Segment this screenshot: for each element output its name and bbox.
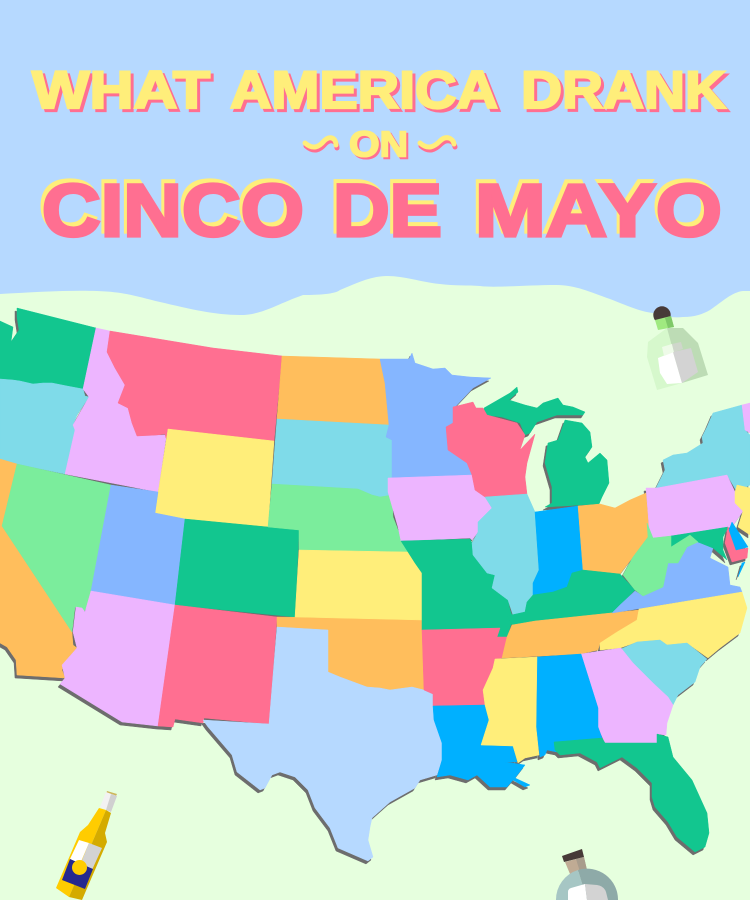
- icon: tequila bottle bottom: [556, 849, 618, 900]
- state: pennsylvania: [646, 475, 743, 539]
- title line 2: on with squiggles: ON: [351, 126, 410, 166]
- state: michigan upper peninsula: [484, 387, 585, 435]
- state: arizona: [60, 591, 175, 726]
- state: texas: [203, 627, 442, 861]
- state: oregon: [0, 379, 89, 474]
- state: iowa: [388, 475, 492, 541]
- title line 3: cinco de mayo: MAYO: [472, 165, 719, 248]
- state: north carolina: [600, 592, 747, 658]
- state: new jersey: [735, 485, 750, 535]
- title line 1: what america drank: WHAT: [32, 61, 210, 120]
- state: maryland: [671, 527, 728, 560]
- state: nevada: [2, 464, 111, 632]
- state: illinois: [472, 494, 539, 615]
- state: florida: [554, 734, 709, 852]
- state: minnesota: [380, 353, 491, 478]
- state: tennessee: [502, 610, 639, 658]
- state: montana: [107, 331, 282, 441]
- ground wave: [0, 276, 750, 900]
- state: indiana: [533, 506, 583, 595]
- state: wisconsin: [446, 402, 535, 497]
- title line 3: cinco de mayo: MAYO: [475, 169, 722, 252]
- state: louisiana: [433, 705, 530, 787]
- state: south dakota: [272, 419, 392, 497]
- state: missouri: [401, 539, 513, 637]
- title line 3: cinco de mayo: DE: [333, 169, 442, 252]
- state: mississippi: [481, 657, 539, 763]
- state: wyoming: [155, 429, 274, 527]
- title line 3: cinco de mayo: CINCO: [42, 169, 304, 252]
- title line 3: cinco de mayo: [39, 165, 722, 252]
- state: west virginia: [623, 523, 698, 596]
- title line 1: what america drank: DRANK: [521, 61, 726, 120]
- state: michigan lower peninsula: [545, 420, 609, 507]
- state: virginia: [612, 542, 742, 613]
- state: north dakota: [277, 356, 389, 425]
- state: utah: [91, 485, 185, 605]
- state: kansas: [295, 550, 422, 620]
- state: delaware: [729, 522, 748, 550]
- title line 1: what america drank: DRANK: [524, 64, 729, 123]
- title line 1: what america drank: [32, 61, 729, 123]
- state: idaho: [65, 328, 166, 492]
- state: south carolina: [621, 640, 707, 705]
- title line 2: on with squiggles: ON: [349, 124, 408, 164]
- state: ohio: [578, 493, 649, 574]
- title line 1: what america drank: AMERICA: [233, 64, 501, 123]
- title line 2: on with squiggles: [305, 124, 455, 166]
- state: washington: [0, 308, 96, 389]
- state: new york: [656, 405, 750, 492]
- sky background: [0, 0, 750, 340]
- state: alabama: [536, 654, 602, 757]
- state: vermont and massachusetts: [742, 403, 750, 433]
- state: nebraska: [268, 484, 408, 552]
- state: virginia east shore: [738, 562, 745, 577]
- title line 3: cinco de mayo: CINCO: [39, 165, 301, 248]
- state: colorado: [175, 519, 299, 617]
- title: [32, 61, 729, 252]
- state: kentucky: [507, 570, 635, 625]
- state: new mexico: [158, 605, 277, 727]
- title line 1: what america drank: WHAT: [35, 64, 213, 123]
- state: delaware east shore: [725, 527, 748, 562]
- state: georgia: [581, 648, 673, 743]
- us state map: [0, 308, 750, 861]
- icon: beer bottle bottom left: [56, 791, 117, 900]
- state: california: [0, 459, 77, 678]
- icon: tequila bottle top right: [647, 306, 708, 390]
- state: oklahoma: [277, 617, 424, 690]
- state: arkansas: [422, 628, 507, 706]
- title line 3: cinco de mayo: DE: [330, 165, 439, 248]
- title line 1: what america drank: AMERICA: [230, 61, 498, 120]
